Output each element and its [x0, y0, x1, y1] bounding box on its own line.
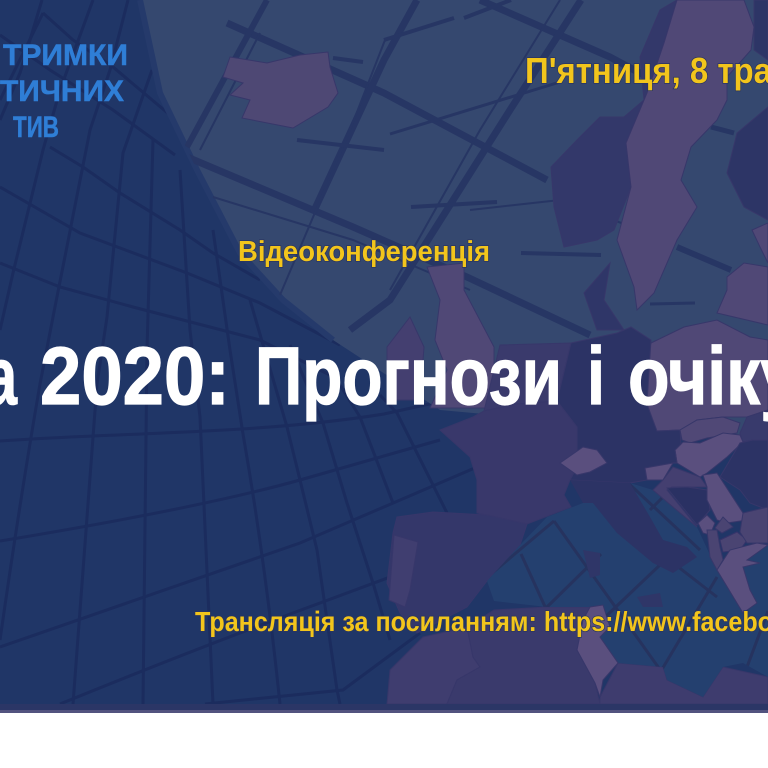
- organisation name: ТРИМКИ: [3, 39, 128, 72]
- event type: Відеоконференція: [238, 236, 490, 268]
- map: Macedonia: [720, 532, 747, 552]
- map: Switzerland: [560, 447, 607, 475]
- map: Serbia: [703, 473, 747, 523]
- organisation name: [0, 39, 128, 144]
- map: France: [440, 401, 577, 524]
- map: Greece: [717, 543, 768, 613]
- globe upper area: [140, 0, 768, 440]
- map: Italy: [570, 480, 697, 573]
- bottom border line: [0, 710, 768, 713]
- map: Sardinia: [583, 550, 600, 578]
- map: Baltics: [752, 223, 768, 263]
- map: Denmark: [584, 263, 624, 330]
- map: Kosovo: [715, 517, 733, 533]
- map: Romania: [720, 440, 768, 510]
- map: sea grid: [491, 480, 768, 671]
- map: Tunisia: [577, 605, 618, 697]
- globe grid: [187, 0, 734, 335]
- map: east dark land: [727, 107, 768, 220]
- map: Morocco: [387, 627, 480, 704]
- map: Hungary: [675, 433, 743, 477]
- map: Scandinavia west: [551, 0, 677, 247]
- bottom dark band: [0, 704, 768, 710]
- map: Libya: [600, 663, 768, 704]
- map: Croatia: [653, 467, 707, 527]
- map: Britain: [427, 263, 494, 408]
- map: Germany and central land: [557, 327, 681, 483]
- lower-left grid: [0, 0, 477, 704]
- main title: [0, 331, 768, 422]
- map: Algeria: [447, 607, 600, 704]
- map: Spain: [387, 512, 527, 633]
- map: Sicily: [637, 593, 663, 607]
- map: Portugal: [389, 535, 418, 607]
- main title: і: [587, 331, 605, 422]
- main title: Прогнози: [255, 331, 562, 422]
- map: Bulgaria: [740, 507, 768, 543]
- main title: 2020:: [40, 331, 230, 422]
- map: Ukraine: [740, 410, 768, 442]
- map: Ireland: [387, 317, 424, 400]
- map: Iceland: [223, 52, 338, 128]
- map: Sweden: [617, 0, 754, 310]
- map: Benelux: [484, 343, 571, 411]
- map: Montenegro: [698, 515, 715, 535]
- map of Europe: [223, 0, 768, 704]
- map: Slovakia: [680, 417, 740, 443]
- map: north-east dark land: [754, 0, 768, 60]
- map: Mediterranean sea: [487, 483, 768, 697]
- map: Albania: [707, 530, 723, 570]
- organisation name: ТИВ: [13, 111, 59, 144]
- organisation name: ТИЧНИХ: [0, 75, 124, 108]
- map: Bosnia: [667, 487, 710, 525]
- map: Poland and Czechia: [648, 320, 768, 430]
- map: Slovenia: [645, 463, 673, 480]
- map: Belarus area: [717, 263, 768, 325]
- globe edge: [140, 0, 333, 340]
